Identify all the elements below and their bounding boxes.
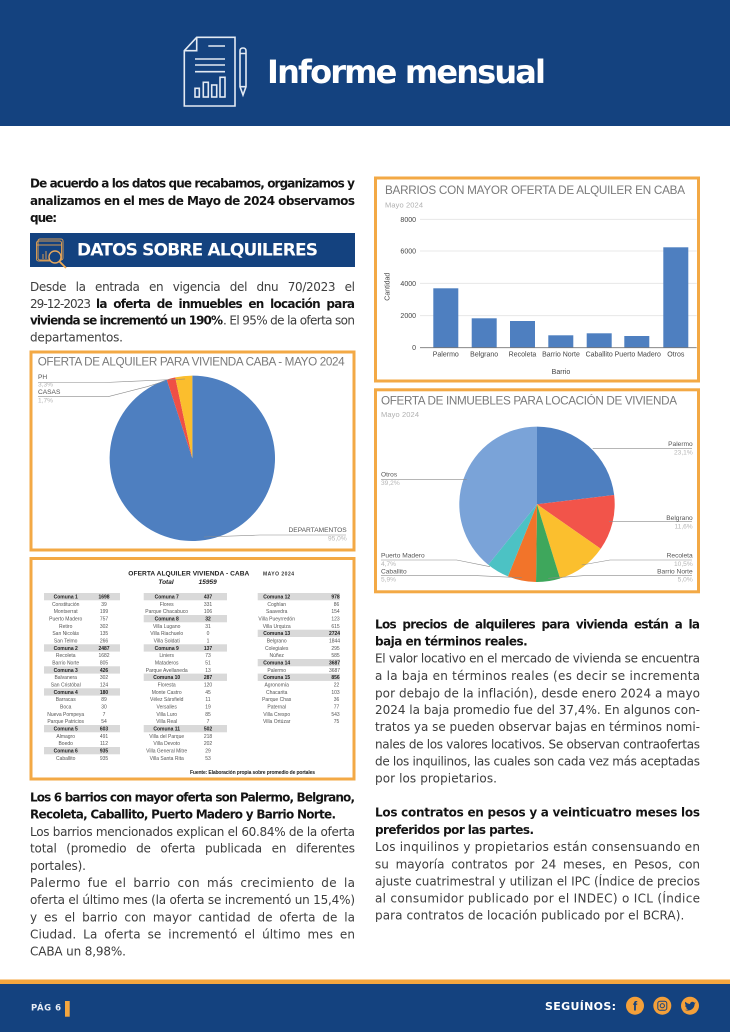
table column 2: 202 xyxy=(204,741,212,747)
table column 3: 123 xyxy=(331,616,340,622)
chart axes labels xyxy=(384,217,685,376)
table column 1: 426 xyxy=(100,668,108,674)
table column 2: Floresta xyxy=(158,682,176,688)
icon: facebook xyxy=(626,997,644,1015)
pie labels: PH xyxy=(38,374,47,381)
table column 2: 331 xyxy=(204,602,212,608)
table column 3: Saavedra xyxy=(266,609,288,615)
table column 3: 36 xyxy=(334,697,339,703)
text block: seis barrios: portales). xyxy=(30,859,86,873)
table column 3: Comuna 12 xyxy=(263,594,290,600)
table column 2: 7 xyxy=(207,719,210,725)
intro text: analizamos en el mes de Mayo de 2024 observamos xyxy=(30,194,355,208)
table column 2: 29 xyxy=(205,748,211,754)
table column 2: 51 xyxy=(205,660,211,666)
pie labels: Caballito xyxy=(381,568,407,575)
paragraph: oferta: departamentos. xyxy=(30,331,123,345)
table column 2: Versalles xyxy=(157,704,177,710)
table column 1: 135 xyxy=(100,631,108,637)
table column 1: 89 xyxy=(101,697,107,703)
table column 1: Balvanera xyxy=(54,675,77,681)
table column 3: 3687 xyxy=(329,660,340,666)
pie labels: Belgrano xyxy=(666,515,693,522)
table column 2: 1 xyxy=(207,638,210,644)
table column 3: Paternal xyxy=(267,704,286,710)
table column 2: 85 xyxy=(205,712,211,718)
pie labels: 95,0% xyxy=(328,536,347,543)
table column 3: Agronomía xyxy=(264,682,289,688)
text block: contratos: preferidos por las partes. xyxy=(375,823,534,837)
table column 1: Retiro xyxy=(59,624,73,630)
table column 1: Boca xyxy=(60,704,72,710)
panel: pie chart by property type xyxy=(31,352,354,550)
pie labels: Barrio Norte xyxy=(657,568,693,575)
text block: seis barrios: Palermo fue el barrio con más crecimiento de la xyxy=(30,876,355,890)
table column 2 xyxy=(144,593,227,762)
page number xyxy=(31,1001,70,1017)
table column 3: 1844 xyxy=(329,638,340,644)
paragraph: oferta: Desde la entrada en vigencia del dnu 70/2023 el xyxy=(30,280,355,294)
table column 1: San Cristóbal xyxy=(51,682,81,688)
intro text xyxy=(30,176,355,225)
table column 2: Villa Riachuelo xyxy=(150,631,183,637)
table column 3: Colegiales xyxy=(265,646,289,652)
banner heading: DATOS SOBRE ALQUILERES xyxy=(77,240,318,260)
table column 1: Barracas xyxy=(56,697,76,703)
text block: precios: Los precios de alquileres para vivienda están a la xyxy=(375,617,700,631)
panel: table by comuna xyxy=(31,558,354,779)
table column 3: Belgrano xyxy=(267,638,287,644)
table column 2: 11 xyxy=(205,697,211,703)
table column 1: Montserrat xyxy=(54,609,78,615)
table column 1: 935 xyxy=(100,756,108,762)
table column 1: Comuna 5 xyxy=(54,726,78,732)
table column 2: Villa Luro xyxy=(156,712,177,718)
text block: seis barrios: Los barrios mencionados explican el 60.84% de la oferta xyxy=(30,825,355,839)
table column 3: 2724 xyxy=(329,631,340,637)
pie labels xyxy=(38,374,347,543)
table column 3: 103 xyxy=(331,690,340,696)
icon: facebook: f xyxy=(633,998,638,1014)
footer band xyxy=(0,980,730,1032)
table column 1: Caballito xyxy=(56,756,76,762)
table column 2: Villa Soldati xyxy=(154,638,180,644)
table column 2: 120 xyxy=(204,682,212,688)
table column 1: Constitución xyxy=(52,602,80,608)
table column 3: 77 xyxy=(334,704,339,710)
pie labels: Recoleta xyxy=(667,553,693,560)
chart axes labels: Recoleta xyxy=(509,352,536,359)
table column 3: 75 xyxy=(334,719,339,725)
table column 2: Parque Avellaneda xyxy=(146,668,188,674)
table column 1: 39 xyxy=(101,602,107,608)
table column 1: 491 xyxy=(100,734,108,740)
table column 3: Villa Crespo xyxy=(263,712,290,718)
table column 3: Núñez xyxy=(269,653,284,659)
text block: seis barrios: CABA un 8,98%. xyxy=(30,945,126,959)
table column 3: 615 xyxy=(331,624,340,630)
text block: seis barrios xyxy=(30,791,355,959)
table column 1: 302 xyxy=(100,624,108,630)
text block: seis barrios: y es el barrio con mayor cantidad de oferta de la xyxy=(30,911,355,925)
table column 2: Comuna 11 xyxy=(153,726,180,732)
table column 2: Villa Devoto xyxy=(153,741,180,747)
table column 1: 7 xyxy=(103,712,106,718)
chart title: OFERTA DE INMUEBLES PARA LOCACIÓN DE VIVIENDA xyxy=(381,394,677,407)
text block: seis barrios: Recoleta, Caballito, Puerto Madero y Barrio Norte. xyxy=(30,808,336,822)
chart title: BARRIOS CON MAYOR OFERTA DE ALQUILER EN CABA xyxy=(385,184,685,197)
table title: MAYO 2024 xyxy=(263,572,294,578)
pie labels: 3,3% xyxy=(38,382,53,389)
table column 1: 199 xyxy=(100,609,108,615)
icon: twitter xyxy=(681,997,699,1015)
table column 1 xyxy=(44,593,120,762)
panel: pie chart by barrio xyxy=(376,390,698,592)
table column 2: 287 xyxy=(204,675,212,681)
table source note: Fuente: Elaboración propia sobre promedio de portales xyxy=(190,770,315,776)
table column 2: Monte Castro xyxy=(152,690,182,696)
text block: contratos xyxy=(375,806,700,922)
text block: contratos: para contratos de locación publicado por el BCRA). xyxy=(375,908,684,922)
table column 1: Puerto Madero xyxy=(49,616,82,622)
table column 2: 13 xyxy=(205,668,211,674)
table column 3: 154 xyxy=(331,609,340,615)
text block: seis barrios: oferta el último mes (la oferta se incrementó un 15,4%) xyxy=(30,893,355,907)
table column 2: 19 xyxy=(205,704,211,710)
text block: seis barrios: Ciudad. La oferta se incrementó el último mes en xyxy=(30,928,355,942)
chart subtitle: Mayo 2024 xyxy=(381,410,419,419)
table column 1: Comuna 6 xyxy=(54,748,78,754)
paragraph: oferta xyxy=(30,280,355,345)
table column 1: 266 xyxy=(100,638,108,644)
table column 1: San Nicolás xyxy=(52,631,80,637)
table column 3: 978 xyxy=(331,594,340,600)
text block: seis barrios: total (promedio de oferta publicada en diferentes xyxy=(30,842,355,856)
pie labels: Palermo xyxy=(668,441,693,448)
paragraph: oferta: . El 95% de la oferta son xyxy=(223,314,355,328)
table column 3: 295 xyxy=(331,646,340,652)
paragraph: oferta: la oferta de inmuebles en locación para xyxy=(96,297,355,311)
table column 1: 180 xyxy=(100,690,108,696)
text block: precios: tratos ya se pueden observar bajas en términos nomi- xyxy=(375,720,700,734)
social label: SEGUÍNOS: xyxy=(545,1000,616,1013)
panel: bar chart by barrio xyxy=(376,178,698,381)
text block: precios: baja en términos reales. xyxy=(375,635,528,649)
table column 3: Villa Ortúzar xyxy=(263,719,291,725)
pie slices xyxy=(459,427,615,582)
table column 1: Comuna 1 xyxy=(54,594,78,600)
table column 1: Parque Patricios xyxy=(47,719,85,725)
table column 2: Comuna 10 xyxy=(153,675,180,681)
table title xyxy=(128,571,294,586)
table column 1: 757 xyxy=(100,616,108,622)
chart axes labels: Otros xyxy=(667,352,685,359)
title: Informe mensual xyxy=(267,53,546,91)
table column 3: Villa Pueyrredón xyxy=(258,616,295,622)
icon: browser window and magnifier xyxy=(36,239,66,268)
table column 3: 543 xyxy=(331,712,340,718)
table column 2: 31 xyxy=(205,624,211,630)
section banner xyxy=(30,233,355,268)
table column 3: Palermo xyxy=(267,668,286,674)
text block: precios: El valor locativo en el mercado de vivienda se encuentra xyxy=(375,652,700,666)
pie slices xyxy=(110,376,275,541)
chart axes labels: Barrio Norte xyxy=(542,352,580,359)
table column 3: Villa Urquiza xyxy=(263,624,291,630)
pie labels: 4,7% xyxy=(381,561,396,568)
table column 2: Villa Real xyxy=(156,719,177,725)
chart axes labels: Palermo xyxy=(433,352,459,359)
table column 1: 805 xyxy=(100,660,108,666)
pie labels: 5,0% xyxy=(678,577,693,584)
table column 2: Parque Chacabuco xyxy=(145,609,188,615)
table column 1: Comuna 3 xyxy=(54,668,78,674)
chart subtitle: Mayo 2024 xyxy=(385,200,423,209)
table column 2: 73 xyxy=(205,653,211,659)
table column 2: 0 xyxy=(207,631,210,637)
chart axes labels: 8000 xyxy=(400,217,416,224)
table column 2: 53 xyxy=(205,756,211,762)
table title: 15959 xyxy=(199,579,217,586)
chart axes labels: Cantidad xyxy=(384,273,392,301)
text block: precios: a la baja en términos reales (es decir se incrementa xyxy=(375,669,700,683)
chart axes labels: Puerto Madero xyxy=(615,352,661,359)
pie labels: 39,2% xyxy=(381,480,400,487)
table column 2: 32 xyxy=(205,616,211,622)
table column 2: Mataderos xyxy=(155,660,179,666)
table title: Total xyxy=(158,579,174,586)
table column 3: 585 xyxy=(331,653,340,659)
table column 2: Villa Lugano xyxy=(153,624,181,630)
table column 2: Villa Santa Rita xyxy=(150,756,184,762)
table column 2: Flores xyxy=(160,602,174,608)
table column 2: 45 xyxy=(205,690,211,696)
paragraph: oferta: 29-12-2023 xyxy=(30,297,91,311)
pie labels xyxy=(381,441,693,584)
table column 2: 218 xyxy=(204,734,212,740)
header band xyxy=(0,0,730,126)
icon: instagram xyxy=(653,997,671,1015)
chart axes labels: Belgrano xyxy=(470,352,498,359)
table column 1: 603 xyxy=(100,726,108,732)
chart title: OFERTA DE ALQUILER PARA VIVIENDA CABA - MAYO 2024 xyxy=(38,356,345,369)
text block: contratos: al consumidor publicado por el INDEC) o ICL (Índice xyxy=(375,890,700,905)
page number: PÁG 6 xyxy=(31,1002,61,1014)
table column 3: Comuna 15 xyxy=(263,675,290,681)
chart axes labels: Caballito xyxy=(586,352,613,359)
text block: contratos: Los inquilinos y propietarios están consensuando en xyxy=(375,840,700,854)
table title: OFERTA ALQUILER VIVIENDA - CABA xyxy=(128,571,250,578)
pie labels: 23,1% xyxy=(674,449,693,456)
table column 1: Comuna 4 xyxy=(54,690,78,696)
text block: contratos: su mayoría contratos por 24 meses, en Pesos, con xyxy=(375,857,700,871)
table column 1: 30 xyxy=(101,704,107,710)
table column 1: Recoleta xyxy=(56,653,76,659)
text block: precios: por los propietarios. xyxy=(375,771,497,785)
icon: document with chart and pencil xyxy=(184,37,246,106)
table column 1: Almagro xyxy=(56,734,75,740)
table column 2: 502 xyxy=(204,726,212,732)
chart axes labels: 4000 xyxy=(400,281,416,288)
pie labels: Puerto Madero xyxy=(381,553,425,560)
table column 3: 856 xyxy=(331,675,340,681)
table column 2: 437 xyxy=(204,594,212,600)
text block: precios xyxy=(375,617,700,785)
table column 1: 112 xyxy=(100,741,108,747)
pie labels: 11,6% xyxy=(674,523,693,530)
text block: precios: por debajo de la inflación), desde enero 2024 a mayo xyxy=(375,686,700,700)
table column 1: 935 xyxy=(100,748,108,754)
text block: contratos: ajuste cuatrimestral y utilizan el IPC (Índice de precios xyxy=(375,874,700,889)
table column 1: Boedo xyxy=(58,741,73,747)
table column 2: Vélez Sársfield xyxy=(150,697,184,703)
table column 1: Barrio Norte xyxy=(52,660,79,666)
table column 2: Comuna 7 xyxy=(155,594,179,600)
intro text: que: xyxy=(30,211,57,225)
table column 1: San Telmo xyxy=(54,638,78,644)
table column 2: 106 xyxy=(204,609,212,615)
intro text: De acuerdo a los datos que recabamos, organizamos y xyxy=(30,176,355,190)
table column 2: Villa General Mitre xyxy=(146,748,187,754)
table column 1: 1682 xyxy=(98,653,110,659)
pie labels: 10,5% xyxy=(674,561,693,568)
table column 2: Villa del Parque xyxy=(149,734,184,740)
table column 1: 124 xyxy=(100,682,108,688)
table column 3: 86 xyxy=(334,602,339,608)
table column 2: Comuna 8 xyxy=(155,616,179,622)
table column 3: 22 xyxy=(334,682,339,688)
table column 3: Parque Chas xyxy=(262,697,292,703)
table column 1: Comuna 2 xyxy=(54,646,78,652)
pie labels: 1,7% xyxy=(38,397,53,404)
pie labels: 5,9% xyxy=(381,577,396,584)
pie labels: Otros xyxy=(381,472,398,479)
pie labels: DEPARTAMENTOS xyxy=(289,527,347,534)
chart axes labels: 0 xyxy=(412,345,416,352)
pie labels: CASAS xyxy=(38,389,61,396)
text block: contratos: Los contratos en pesos y a veinticuatro meses los xyxy=(375,806,700,820)
table column 1: 1698 xyxy=(98,594,110,600)
table column 3: Comuna 14 xyxy=(263,660,290,666)
text block: precios: 2024 la baja promedio fue del 37,4%. En algunos con- xyxy=(375,703,700,717)
table column 3: Comuna 13 xyxy=(263,631,290,637)
table column 3: 3687 xyxy=(329,668,340,674)
table column 1: 2487 xyxy=(98,646,110,652)
table column 1: 302 xyxy=(100,675,108,681)
chart axes labels: 2000 xyxy=(400,313,416,320)
chart axes labels: 6000 xyxy=(400,248,416,256)
table column 2: Comuna 9 xyxy=(155,646,179,652)
chart axes labels: Barrio xyxy=(552,369,570,376)
table column 2: 137 xyxy=(204,646,212,652)
table column 3: Coghlan xyxy=(267,602,286,608)
text block: precios: de los inquilinos, las cuales son cada vez más aceptadas xyxy=(375,755,700,769)
table column 3: Chacarita xyxy=(266,690,288,696)
table column 2: Liniers xyxy=(159,653,175,659)
paragraph: oferta: vivienda se incrementó un 190% xyxy=(30,314,223,328)
text block: seis barrios: Los 6 barrios con mayor oferta son Palermo, Belgrano, xyxy=(30,791,355,805)
text block: precios: nales de los valores locativos. Se observan contraofertas xyxy=(375,737,700,751)
table column 1: 54 xyxy=(101,719,107,725)
bar chart xyxy=(420,219,697,348)
table column 1: Nueva Pompeya xyxy=(47,712,84,718)
table column 3 xyxy=(258,593,340,725)
